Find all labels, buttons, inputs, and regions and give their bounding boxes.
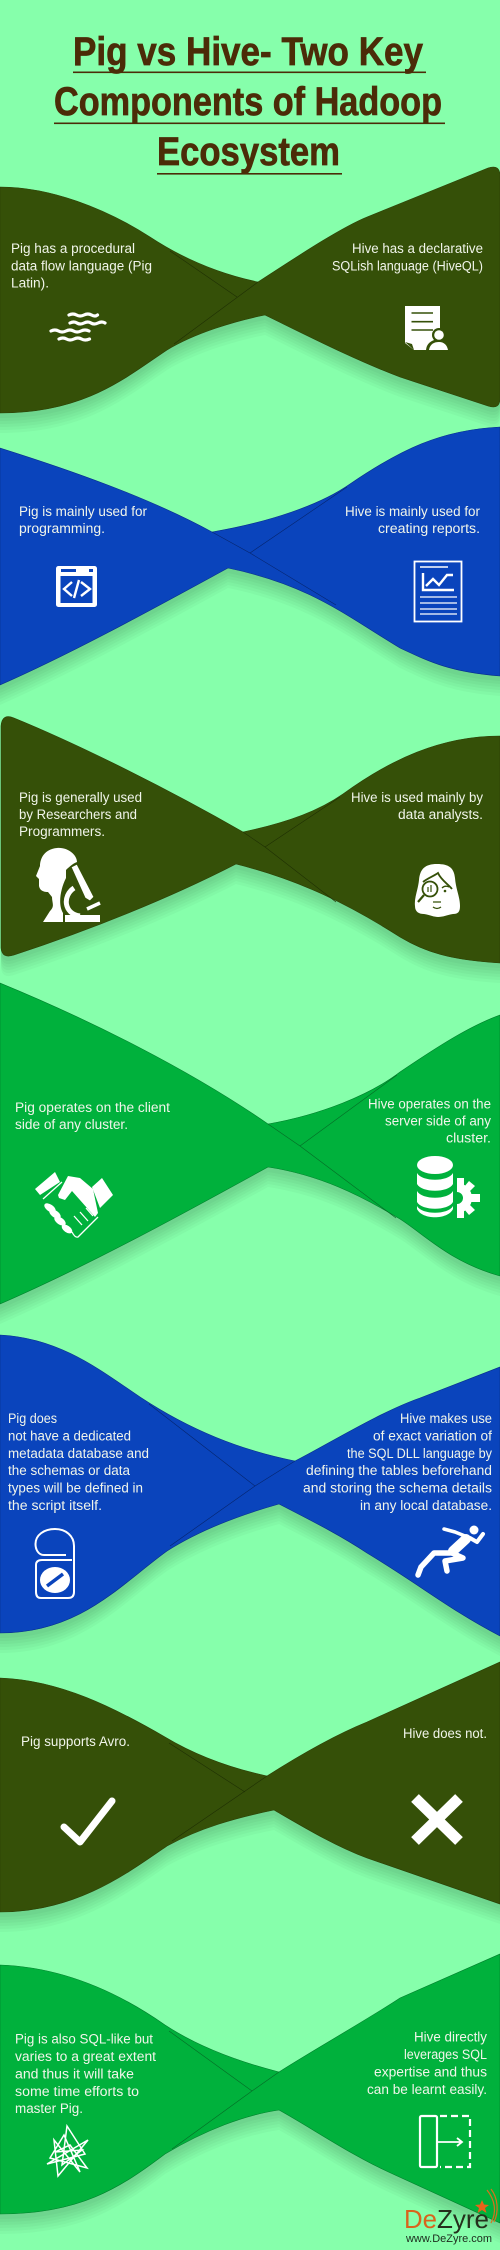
left text: Pig learning: varies to a great extent [15, 2049, 156, 2064]
icon: handshake [35, 1172, 113, 1237]
left text: Pig use: Pig is mainly used for [19, 504, 147, 519]
right text: Hive learning [367, 2030, 487, 2097]
right text: Hive metadata: and storing the schema details [303, 1480, 492, 1496]
left text: Pig users: Programmers. [19, 824, 105, 839]
left text: Pig client: side of any cluster. [15, 1117, 128, 1132]
icon: runner [418, 1526, 483, 1575]
right text: Hive use: creating reports. [378, 521, 480, 536]
left text: Pig client [15, 1100, 170, 1132]
left text: Pig metadata: the schemas or data [8, 1463, 130, 1478]
icon: check mark [64, 1801, 112, 1842]
left text: Pig users: by Researchers and [19, 807, 137, 822]
left text: Pig metadata: types will be defined in [8, 1480, 143, 1496]
right text: Hive server: server side of any [385, 1114, 491, 1128]
left text: Pig learning [15, 2032, 156, 2116]
left text: Pig use: programming. [19, 521, 105, 536]
left text: Pig language: Pig has a procedural [11, 241, 135, 256]
right text: Hive learning: Hive directly [414, 2030, 487, 2044]
right text: Hive users: Hive is used mainly by [351, 790, 483, 805]
logo: DeZyre [404, 2189, 497, 2245]
left text: Pig language: Latin). [11, 276, 49, 290]
left text: Pig metadata: the script itself. [8, 1498, 102, 1513]
icon: analyst face with magnifier [415, 864, 460, 917]
right text: Hive metadata: defining the tables beforehand [306, 1463, 492, 1478]
right text: Hive language [332, 241, 483, 274]
title: Ecosystem [157, 130, 340, 174]
left text: Pig learning: and thus it will take [15, 2066, 134, 2082]
icon: cross [415, 1798, 459, 1841]
icon: dashed expand box [420, 2116, 470, 2167]
icon: data flow waves [51, 314, 105, 340]
left text: Pig language [11, 241, 152, 290]
right text: Hive metadata: in any local database. [360, 1498, 492, 1513]
right text: Hive learning: expertise and thus [374, 2064, 487, 2080]
right text: Hive Avro: Hive does not. [403, 1726, 487, 1741]
right text: Hive learning: can be learnt easily. [367, 2082, 487, 2097]
right text: Hive language: SQLish language (HiveQL) [332, 258, 483, 274]
left text: Pig learning: some time efforts to [15, 2084, 139, 2099]
right text: Hive users [351, 790, 483, 822]
left text: Pig language: data flow language (Pig [11, 258, 152, 274]
right text: Hive use [345, 504, 480, 536]
logo: DeZyre: Zyre [437, 2204, 489, 2234]
right text: Hive metadata [303, 1411, 492, 1513]
icon: database with gear [417, 1156, 480, 1218]
left text: Pig metadata: not have a dedicated [8, 1428, 131, 1444]
left text: Pig learning: master Pig. [15, 2101, 83, 2116]
right text: Hive server: cluster. [446, 1130, 491, 1146]
icon: code window [56, 566, 97, 607]
panel: users [1, 717, 500, 983]
panel: metadata [0, 1335, 500, 1656]
right text: Hive server: Hive operates on the [368, 1096, 491, 1112]
left text: Pig users: Pig is generally used [19, 790, 142, 805]
panel: cluster side [0, 983, 500, 1324]
left text: Pig users [19, 790, 142, 839]
panel: learning [0, 1954, 500, 2243]
left text: Pig metadata: Pig does [8, 1411, 57, 1426]
logo: DeZyre: www.DeZyre.com [405, 2233, 492, 2245]
title [54, 30, 445, 175]
right text: Hive server [368, 1096, 491, 1146]
left text: Pig Avro: Pig supports Avro. [21, 1734, 130, 1749]
right text: Hive metadata: of exact variation of [373, 1428, 492, 1444]
left text: Pig learning: Pig is also SQL-like but [15, 2032, 153, 2046]
right text: Hive metadata: the SQL DLL language by [347, 1446, 492, 1461]
icon: researcher and microscope [36, 848, 100, 922]
panel: query language [0, 167, 500, 433]
left text: Pig metadata [8, 1411, 149, 1513]
left text: Pig use [19, 504, 147, 536]
icon: tangled star [47, 2126, 88, 2176]
title: Components of Hadoop [54, 80, 442, 124]
right text: Hive users: data analysts. [398, 807, 483, 822]
icon: document with user [405, 306, 450, 351]
panel: Avro [0, 1662, 500, 1932]
title: Pig vs Hive- Two Key [73, 30, 424, 74]
panel: main use [0, 427, 500, 705]
left text: Pig metadata: metadata database and [8, 1446, 149, 1461]
icon: door hanger [36, 1529, 74, 1598]
right text: Hive use: Hive is mainly used for [345, 504, 480, 519]
right text: Hive language: Hive has a declarative [352, 241, 483, 256]
logo: DeZyre: De [404, 2204, 437, 2234]
right text: Hive learning: leverages SQL [404, 2047, 487, 2062]
icon: report [414, 562, 462, 622]
left text: Pig client: Pig operates on the client [15, 1100, 170, 1115]
right text: Hive metadata: Hive makes use [400, 1411, 492, 1426]
